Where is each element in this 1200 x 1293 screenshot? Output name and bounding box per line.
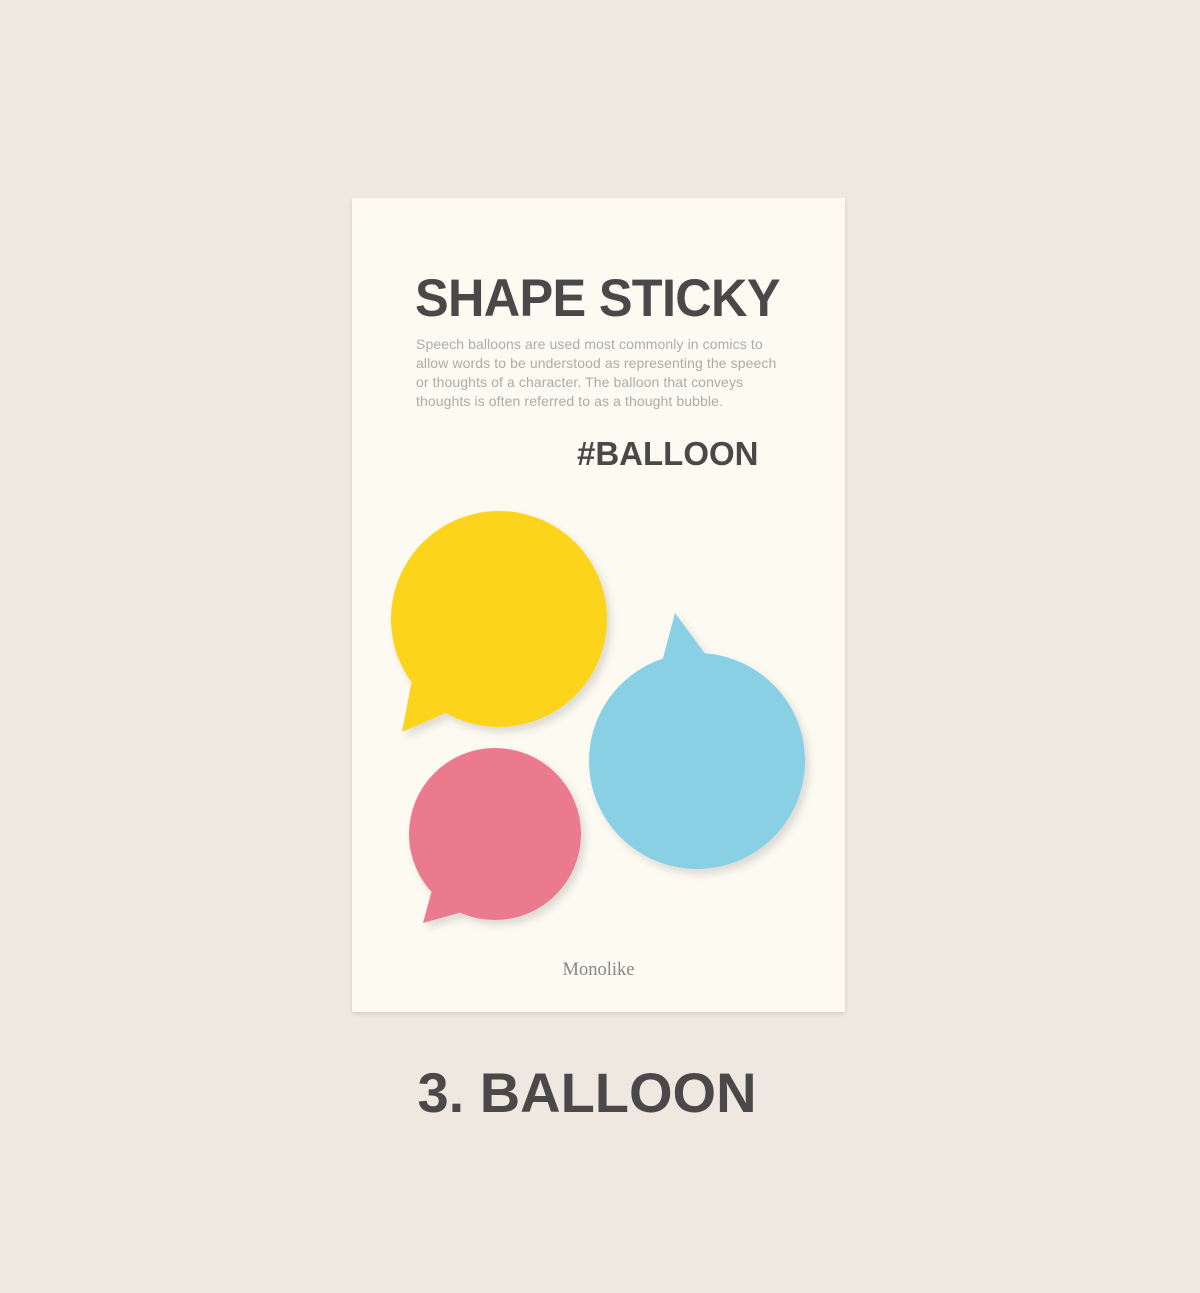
text block: description: or thoughts of a character. The balloon that conveys bbox=[416, 374, 743, 390]
icon: yellow balloon bbox=[391, 511, 607, 732]
text block: description: thoughts is often referred to as a thought bubble. bbox=[416, 393, 723, 409]
caption: 3. BALLOON: 3. BALLOON bbox=[417, 1061, 757, 1124]
heading: #BALLOON: #BALLOON bbox=[577, 435, 758, 472]
brand: Monolike: Monolike bbox=[563, 960, 634, 980]
icon: pink balloon bbox=[409, 748, 581, 923]
panel: card bbox=[352, 198, 845, 1012]
balloons bbox=[391, 511, 812, 928]
icon: blue balloon bbox=[589, 613, 805, 869]
title: SHAPE STICKY bbox=[415, 268, 780, 327]
text block: description bbox=[416, 336, 776, 409]
text block: description: Speech balloons are used most commonly in comics to bbox=[416, 336, 763, 352]
text block: description: allow words to be understood as representing the speech bbox=[416, 355, 776, 371]
